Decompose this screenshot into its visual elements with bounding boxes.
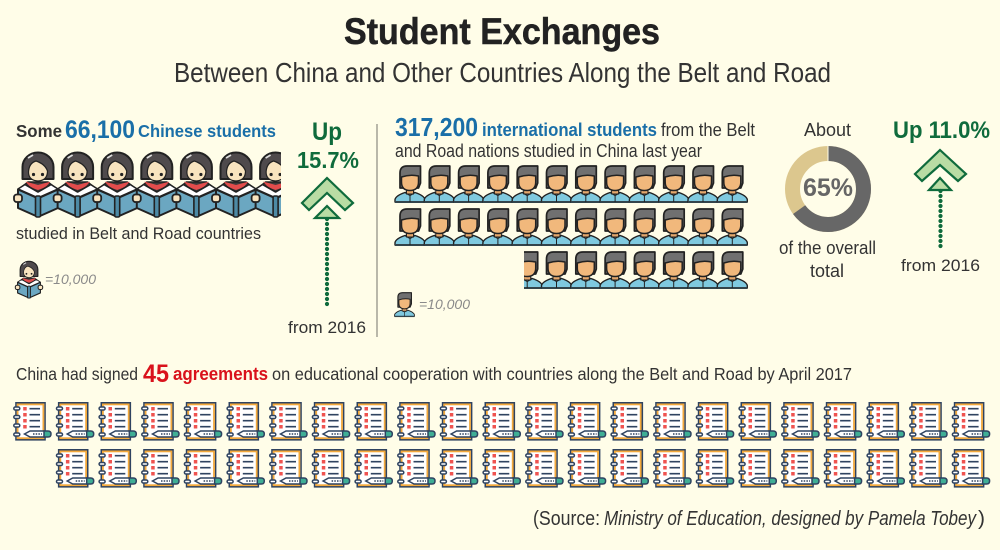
statement: 45 agreements [16, 360, 852, 388]
statement: 45 agreements: 45 [143, 360, 169, 388]
pictogram: boys row 1 [395, 166, 747, 203]
legend: boy icon equals 10,000 [395, 293, 470, 317]
donut chart: 65 percent: 65% [803, 174, 853, 202]
caption: of the overall total: total [810, 261, 844, 281]
source credit: ) [978, 508, 985, 530]
heading: 66,100 Chinese students: 66,100 [65, 116, 135, 144]
legend: girl icon equals 10,000 [15, 261, 96, 298]
heading: 317,200 international students: from the Belt [661, 120, 755, 140]
heading: 66,100 Chinese students: Some [16, 121, 62, 141]
caption: from 2016: from 2016 [901, 256, 980, 275]
growth label: Up 15.7%: Up [312, 118, 342, 146]
statement: 45 agreements: on educational cooperation with countries along the Belt and Road by April 2017 [272, 364, 852, 384]
growth label: Up 15.7% [297, 118, 359, 173]
legend: girl icon equals 10,000: =10,000 [45, 271, 96, 287]
statement: 45 agreements: agreements [173, 364, 268, 384]
statement: 45 agreements: China had signed [16, 364, 138, 384]
arrow: growth up 11.0% [915, 150, 966, 250]
growth label: Up 15.7%: 15.7% [297, 147, 359, 173]
caption: studied in Belt and Road countries: studied in Belt and Road countries [16, 224, 261, 243]
pictogram: boys row 3 [512, 252, 747, 289]
heading: 317,200 international students: 317,200 [395, 112, 478, 142]
title: Student Exchanges [344, 11, 660, 52]
heading: 66,100 Chinese students [16, 116, 276, 144]
donut chart: 65 percent [792, 146, 864, 224]
label: About: About [804, 120, 851, 140]
legend: boy icon equals 10,000: =10,000 [419, 296, 470, 312]
caption: from 2016: from 2016 [288, 318, 366, 337]
panel: educational agreements [14, 360, 990, 487]
subtitle: Between China and Other Countries Along the Belt and Road [174, 57, 831, 88]
heading: 317,200 international students: and Road nations studied in China last year [395, 141, 702, 161]
panel: Chinese students abroad [14, 116, 366, 337]
growth label: Up 11.0%: Up 11.0% [893, 117, 990, 144]
caption: of the overall total: of the overall [779, 238, 876, 258]
heading: 317,200 international students: international students [482, 119, 657, 140]
caption: of the overall total [779, 238, 876, 281]
arrow: growth up 15.7% [302, 178, 353, 306]
heading: 317,200 international students [395, 112, 755, 161]
panel: international students in China [395, 112, 990, 317]
pictogram: boys row 2 [395, 209, 747, 246]
pictogram: notebooks row 2 [56, 450, 990, 487]
pictogram: notebooks row 1 [14, 403, 990, 440]
pictogram: reading girls row [14, 152, 300, 217]
source credit: (Source: [533, 508, 600, 530]
heading: 66,100 Chinese students: Chinese students [138, 121, 276, 141]
